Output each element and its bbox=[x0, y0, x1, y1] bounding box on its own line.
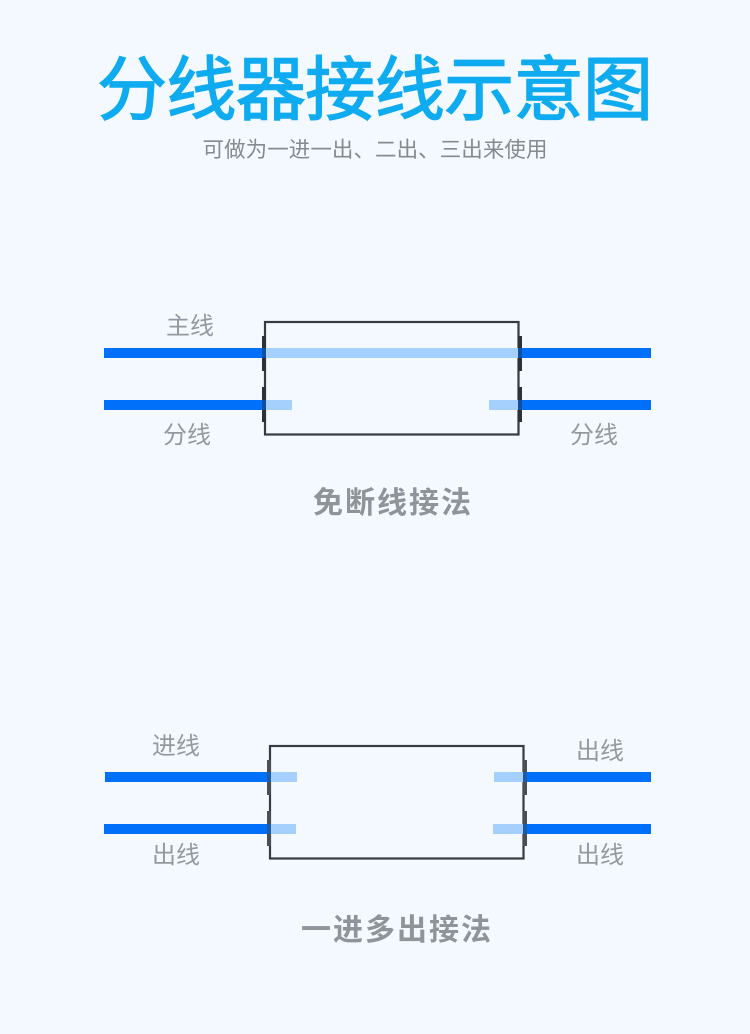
connector box bbox=[265, 322, 518, 434]
lower left wire bbox=[104, 824, 296, 834]
title: 分线器接线示意图 bbox=[97, 51, 653, 129]
label: lower right outgoing: 出线 bbox=[576, 842, 624, 869]
label: incoming wire: 进线 bbox=[152, 733, 200, 760]
connector box bbox=[270, 746, 524, 858]
upper left wire bbox=[105, 772, 297, 782]
label: lower left outgoing: 出线 bbox=[152, 842, 200, 869]
left branch wire bbox=[104, 400, 292, 410]
main wire bbox=[104, 348, 651, 358]
right clamps bbox=[518, 336, 522, 422]
label: right branch: 分线 bbox=[570, 422, 618, 449]
lower right wire bbox=[493, 824, 651, 834]
subtitle: 可做为一进一出、二出、三出来使用 bbox=[202, 138, 548, 162]
left clamps bbox=[262, 336, 266, 422]
caption: one-in multiple-out connection: 一进多出接法 bbox=[301, 914, 491, 947]
caption: through-wire connection: 免断线接法 bbox=[313, 487, 471, 520]
diagram: one-in multiple-out connection bbox=[104, 733, 651, 869]
right clamps bbox=[523, 760, 527, 846]
label: left branch: 分线 bbox=[163, 422, 211, 449]
left clamps bbox=[267, 760, 271, 846]
upper right wire bbox=[494, 772, 651, 782]
right branch wire bbox=[489, 400, 651, 410]
diagram: through-wire connection bbox=[104, 313, 651, 449]
label: main wire: 主线 bbox=[166, 313, 214, 340]
label: upper right outgoing: 出线 bbox=[576, 738, 624, 765]
